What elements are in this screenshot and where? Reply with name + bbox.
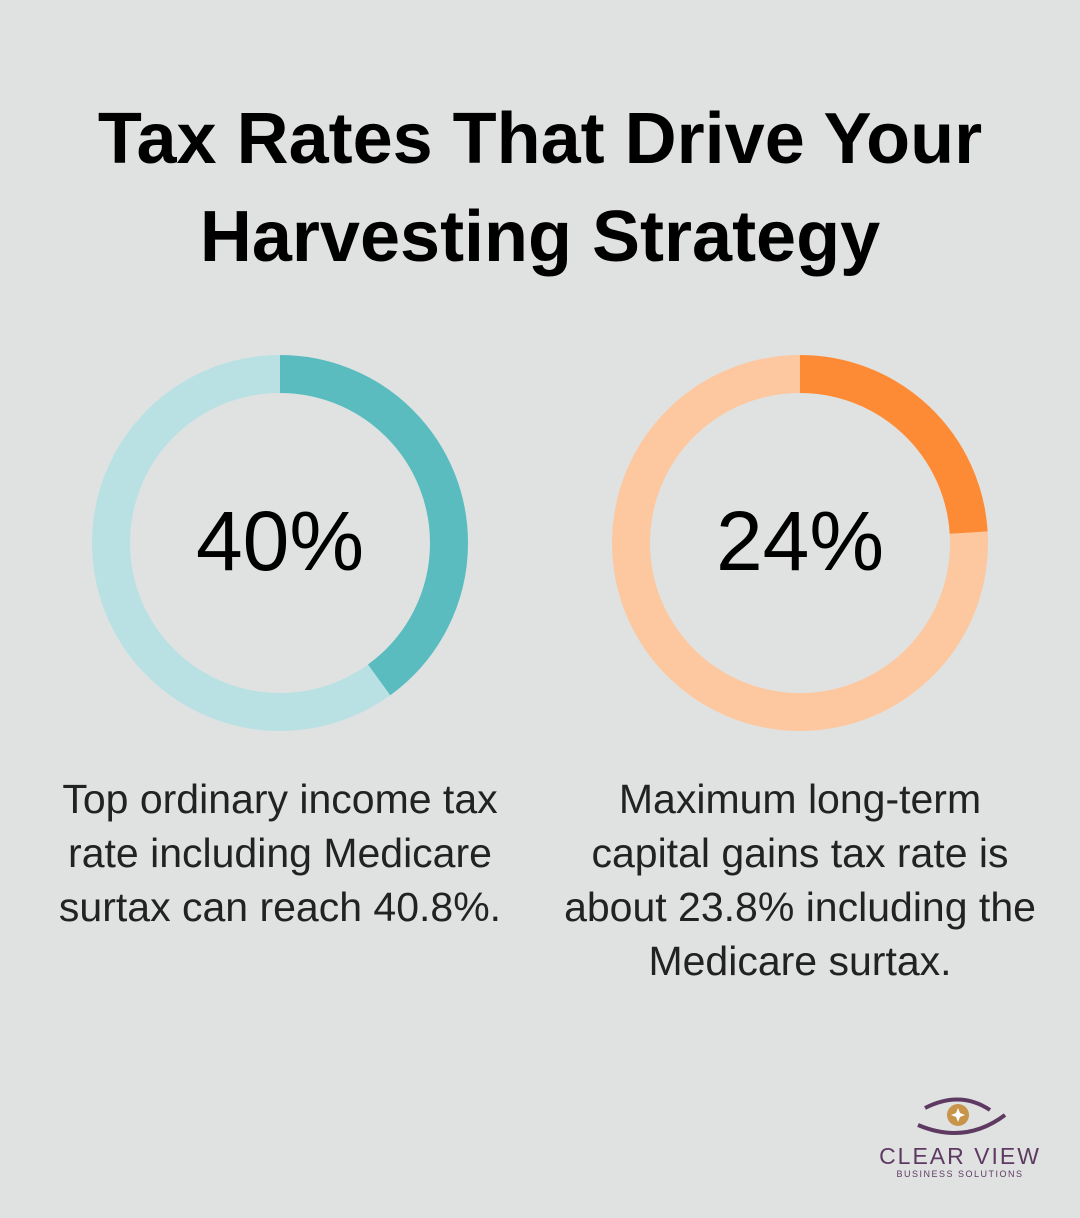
text: right description: Medicare surtax. (648, 938, 952, 984)
donut chart: 40%: 40% (196, 494, 364, 588)
text: left description: Top ordinary income tax (62, 776, 498, 822)
text: left description (59, 776, 501, 930)
text: right description: capital gains tax rate is (591, 830, 1009, 876)
logo text: CLEAR VIEW (879, 1143, 1041, 1169)
text: right description: Maximum long-term (619, 776, 981, 822)
text: left description: surtax can reach 40.8%. (59, 884, 501, 930)
donut chart: 24%: 24% (716, 494, 884, 588)
title: Harvesting Strategy (200, 197, 880, 277)
text: right description: about 23.8% including the (564, 884, 1036, 930)
logo (879, 1098, 1041, 1179)
icon: eye (917, 1098, 1006, 1135)
donut chart: 40% (92, 355, 468, 731)
title: Tax Rates That Drive Your (98, 99, 982, 179)
title (98, 99, 982, 277)
logo: BUSINESS SOLUTIONS (896, 1169, 1024, 1179)
donut chart: 24% (612, 355, 988, 731)
text: left description: rate including Medicare (68, 830, 492, 876)
text: right description (564, 776, 1036, 984)
